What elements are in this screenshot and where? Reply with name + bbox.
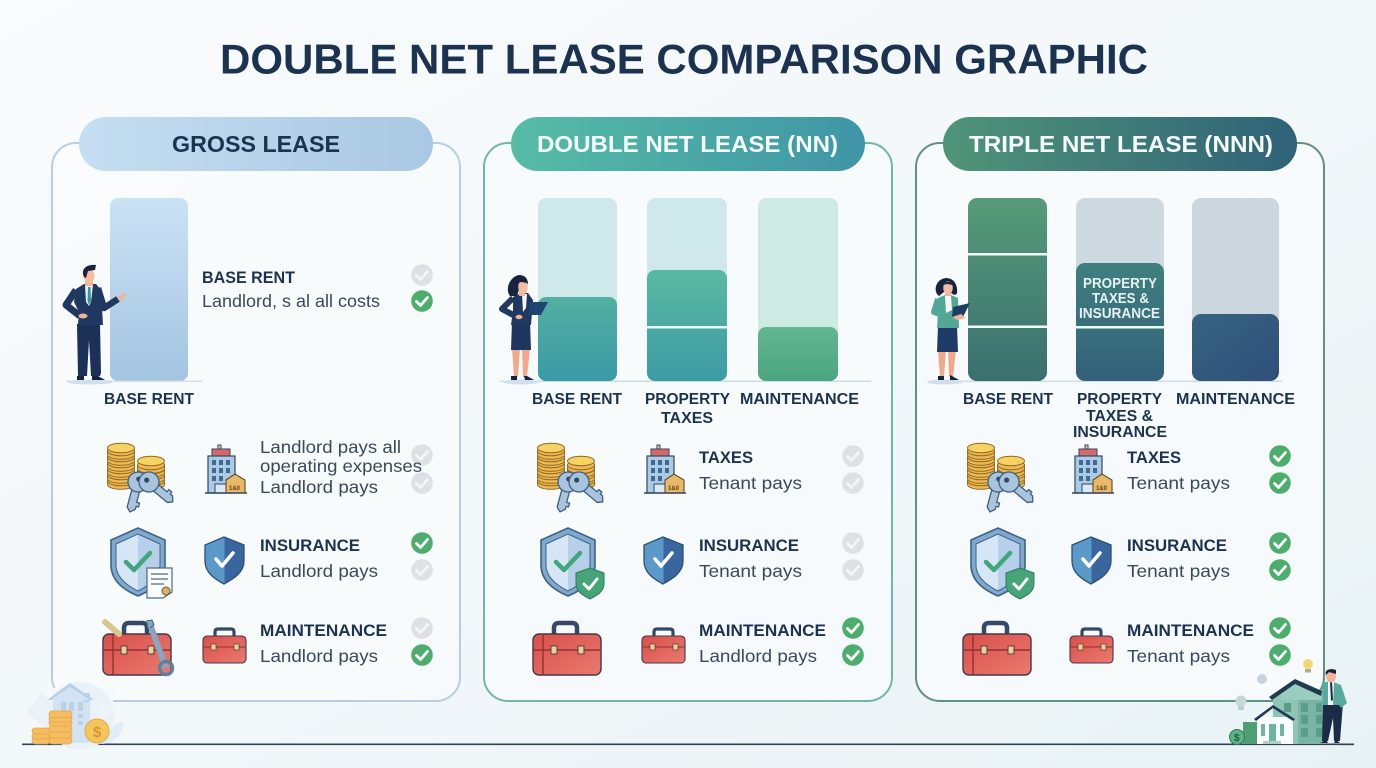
row: maintenance: Landlord pays	[260, 646, 378, 666]
row: maintenance	[260, 617, 433, 666]
row: operating expenses	[260, 437, 433, 497]
figure: businessman	[1320, 669, 1347, 743]
panel: double net lease	[484, 117, 892, 701]
icon: shield with document	[111, 528, 172, 598]
bar: property taxes and insurance: TAXES &	[1086, 408, 1153, 425]
row: taxes: Tenant pays	[1127, 473, 1230, 493]
icon: small toolbox	[1070, 629, 1113, 663]
icon: toolbox	[533, 623, 601, 675]
row: base rent	[202, 264, 433, 312]
bar chart: gross lease: BASE RENT	[104, 391, 194, 408]
row: insurance: Landlord pays	[260, 561, 378, 581]
icon: coins and keys	[108, 443, 179, 515]
ground line	[22, 744, 1354, 745]
heading: gross lease: GROSS LEASE	[172, 131, 340, 157]
bar: base rent: BASE RENT	[532, 391, 622, 408]
icon: small shield	[205, 537, 244, 584]
row: insurance	[260, 532, 433, 581]
row: maintenance: MAINTENANCE	[699, 622, 826, 640]
bar: maintenance: MAINTENANCE	[740, 391, 859, 408]
bar: property taxes and insurance: INSURANCE	[1079, 306, 1160, 322]
row: operating expenses: Landlord pays	[260, 477, 378, 497]
row: maintenance: Tenant pays	[1127, 646, 1230, 666]
row: maintenance: Landlord pays	[699, 646, 817, 666]
bar: maintenance	[740, 198, 859, 408]
row: operating expenses: operating expenses	[260, 456, 422, 476]
bar: property taxes and insurance	[1073, 198, 1167, 441]
row: maintenance: MAINTENANCE	[260, 622, 387, 640]
panel frame: triple net lease	[916, 143, 1324, 701]
heading: triple net lease: TRIPLE NET LEASE (NNN)	[969, 131, 1273, 157]
illustration: house and coins, bottom left: $	[93, 724, 102, 741]
bar: base rent	[532, 198, 622, 408]
bar chart: gross lease	[66, 198, 202, 408]
icon: shield with green badge	[541, 528, 604, 599]
row: base rent: Landlord, s al all costs	[202, 291, 380, 311]
row: insurance: INSURANCE	[1127, 537, 1227, 555]
icon: light bulb	[1303, 659, 1313, 672]
bar: base rent	[963, 198, 1053, 408]
heading: gross lease	[79, 117, 433, 171]
heading: triple net lease	[943, 117, 1297, 171]
icon: small toolbox	[642, 629, 685, 663]
icon: large house	[1269, 679, 1325, 744]
row: insurance: INSURANCE	[699, 537, 799, 555]
illustration: house and coins, bottom left	[26, 682, 124, 750]
row: base rent: BASE RENT	[202, 269, 295, 287]
panel: gross lease	[52, 117, 460, 701]
icon: building	[1072, 445, 1114, 493]
icon: coins and keys	[968, 443, 1039, 515]
row: maintenance: MAINTENANCE	[1127, 622, 1254, 640]
panel: triple net lease	[916, 117, 1324, 701]
figure: businesswoman with clipboard	[927, 278, 970, 384]
icon: cash and coin: $	[1234, 733, 1240, 744]
row: insurance: Tenant pays	[1127, 561, 1230, 581]
row: maintenance	[1127, 617, 1291, 666]
illustration: houses and businessman, bottom right	[1230, 659, 1354, 745]
bar: property taxes and insurance: TAXES &	[1092, 291, 1149, 307]
icon: faded bulb	[1236, 696, 1246, 710]
panel frame: double net lease	[484, 143, 892, 701]
icon: small toolbox	[203, 629, 246, 663]
bar: base rent: BASE RENT	[963, 391, 1053, 408]
bar: property taxes	[645, 198, 730, 427]
bar: property taxes and insurance: PROPERTY	[1077, 391, 1162, 408]
icon: building	[205, 445, 247, 493]
bar: property taxes: TAXES	[661, 410, 713, 427]
icon: toolbox with wrench	[103, 620, 172, 675]
icon: building	[644, 445, 686, 493]
bar chart: triple net lease	[932, 198, 1295, 441]
icon: floating coin	[1252, 669, 1272, 689]
row: operating expenses: Landlord pays all	[260, 437, 401, 457]
figure: businesswoman with tablet	[502, 275, 548, 384]
row: maintenance	[699, 617, 864, 666]
icon: small shield	[644, 537, 683, 584]
row: taxes	[1127, 445, 1291, 494]
row: taxes: Tenant pays	[699, 473, 802, 493]
row: taxes: TAXES	[699, 449, 753, 467]
bar: property taxes: PROPERTY	[645, 391, 730, 408]
panel frame: gross lease	[52, 143, 460, 701]
title: DOUBLE NET LEASE COMPARISON GRAPHIC	[220, 36, 1148, 82]
bar: property taxes and insurance: INSURANCE	[1073, 424, 1167, 441]
icon: coins and keys	[538, 443, 609, 515]
bar: property taxes and insurance: PROPERTY	[1083, 276, 1157, 292]
row: insurance	[1127, 532, 1291, 581]
row: taxes: TAXES	[1127, 449, 1181, 467]
icon: small shield	[1072, 537, 1111, 584]
figure: businessman pointing	[66, 265, 126, 384]
bar chart: double net lease	[500, 198, 871, 427]
bar: maintenance: MAINTENANCE	[1176, 391, 1295, 408]
row: taxes	[699, 445, 864, 494]
row: insurance: Tenant pays	[699, 561, 802, 581]
icon: small house	[1254, 705, 1295, 744]
heading: double net lease: DOUBLE NET LEASE (NN)	[537, 131, 838, 157]
ground segment	[1340, 744, 1354, 745]
bar: maintenance	[1176, 198, 1295, 408]
icon: shield with green badge	[971, 528, 1034, 599]
heading: double net lease	[511, 117, 865, 171]
row: insurance: INSURANCE	[260, 537, 360, 555]
row: insurance	[699, 532, 864, 581]
icon: toolbox	[963, 623, 1031, 675]
